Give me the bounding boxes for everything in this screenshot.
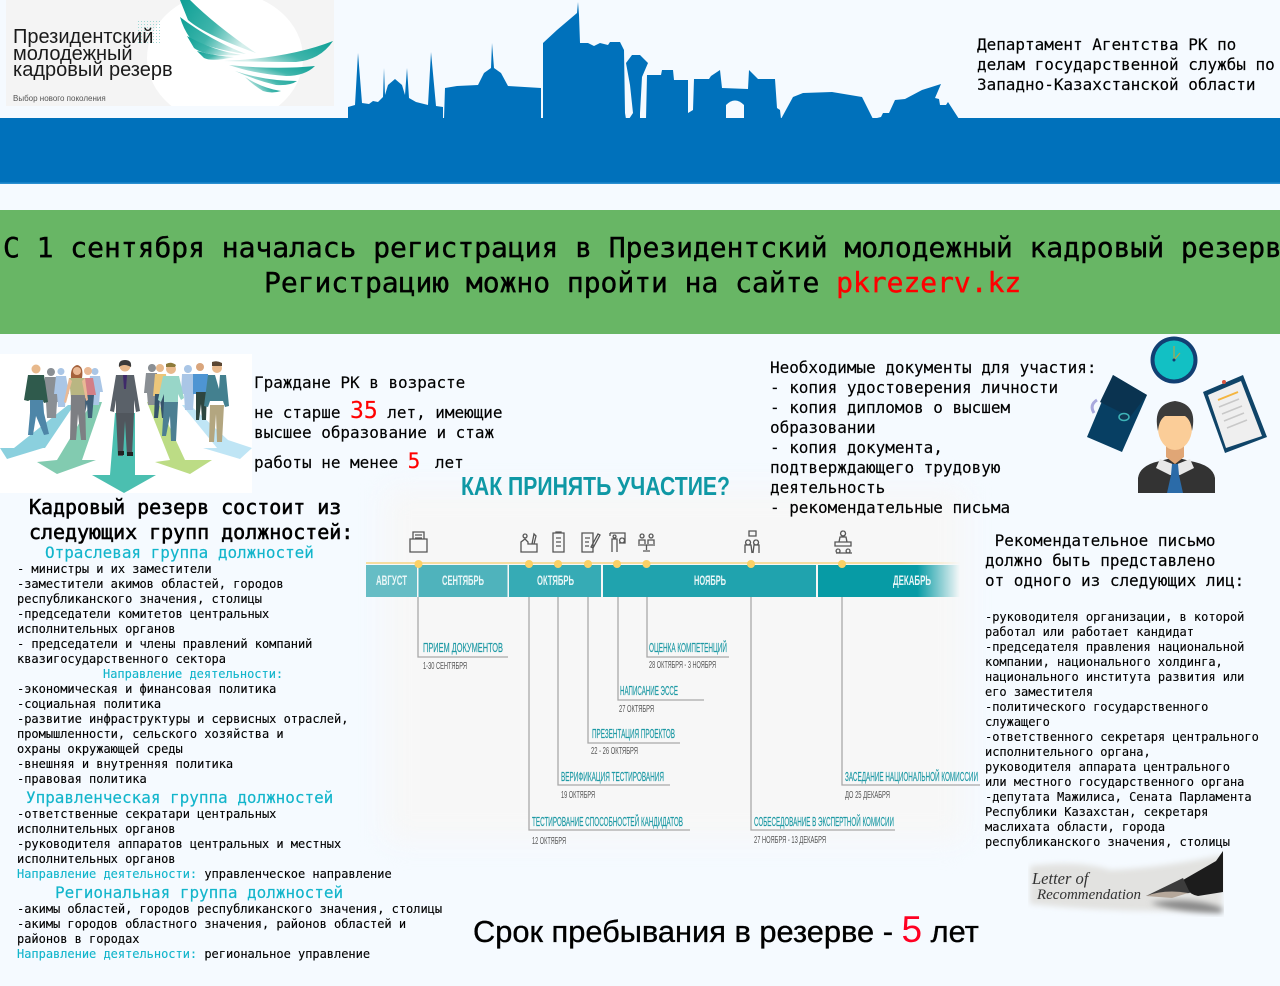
stage dates: ДО 25 ДЕКАБРЯ [845, 790, 890, 801]
arrows [0, 402, 252, 493]
month bars [366, 565, 960, 597]
group: regional [17, 883, 442, 961]
clock [1150, 336, 1198, 384]
regional direction: Направление деятельности: региональное управление [17, 947, 370, 961]
timeline icons [410, 531, 852, 553]
required documents: Необходимые документы для участия: - копия удостоверения личности - копия дипломов о высшем образовании - копия документа, подтверждающего трудовую деятельность - рекомендательные письма [770, 358, 1096, 517]
stage dates: 19 ОКТЯБРЯ [561, 790, 595, 801]
month bars: СЕНТЯБРЬ [442, 572, 484, 588]
person: woman in beige [64, 365, 88, 440]
reserve term: Срок пребывания в резерве - 5 лет [473, 909, 979, 950]
regional positions: -акимы областей, городов республиканского значения, столицы -акимы городов областного значения, районов областей и районов в городах [17, 902, 442, 946]
sectoral heading: Отраслевая группа должностей [45, 543, 314, 562]
stage dates: 27 ОКТЯБРЯ [619, 704, 654, 715]
person: teal jacket [204, 361, 229, 442]
stage labels: ТЕСТИРОВАНИЕ СПОСОБНОСТЕЙ КАНДИДАТОВ [532, 814, 683, 829]
header blue band with skyline [0, 2, 1280, 184]
eligibility line 3: высшее образование и стаж [254, 423, 494, 442]
stage dates: 28 ОКТЯБРЯ - 3 НОЯБРЯ [649, 660, 716, 671]
sectoral positions: - министры и их заместители -заместители акимов областей, городов республиканского значения, столицы -председатели комитетов центральных исполнительных органов - председатели и члены правлений компаний квазигосударственного сектора [17, 562, 312, 666]
pen [1146, 851, 1223, 898]
icon: clerk with clock, folder and clipboard [1087, 336, 1267, 493]
managerial positions: -ответственные секратари центральных исполнительных органов -руководителя аппаратов центральных и местных исполнительных органов [17, 807, 341, 866]
recommendation letter heading: Рекомендательное письмо должно быть представлено от одного из следующих лиц: [985, 531, 1244, 590]
month bars: АВГУСТ [376, 572, 407, 588]
stage dates: 27 НОЯБРЯ - 13 ДЕКАБРЯ [754, 835, 826, 846]
group: managerial [17, 788, 392, 881]
folder [1087, 375, 1147, 452]
clipboard [1203, 375, 1267, 453]
eligibility line 4: работы не менее 5 лет [254, 449, 464, 473]
stage dates: 22 - 26 ОКТЯБРЯ [591, 746, 638, 757]
banner line 1: С 1 сентября началась регистрация в Президентский молодежный кадровый резерв [3, 231, 1280, 264]
chart title: КАК ПРИНЯТЬ УЧАСТИЕ? [461, 471, 730, 501]
person: blue shirt [193, 363, 209, 420]
sectoral directions: -экономическая и финансовая политика -социальная политика -развитие инфраструктуры и сервисных отраслей, промышленности, сельского хозяйства и охраны окружающей среды -внешняя и внутренняя политика -правовая политика [17, 682, 348, 786]
people illustration [0, 354, 252, 493]
person: mint sweater [158, 363, 184, 441]
month bars: ОКТЯБРЬ [537, 572, 574, 588]
stage dates: 12 ОКТЯБРЯ [532, 836, 566, 847]
regional heading: Региональная группа должностей [55, 883, 343, 902]
logo [6, 0, 334, 106]
logo slogan: Выбор нового поколения [13, 94, 106, 103]
handwritten text line 2: Recommendation [1036, 887, 1141, 903]
eligibility text [254, 373, 503, 473]
person: central suit [110, 360, 140, 456]
stage labels: НАПИСАНИЕ ЭССЕ [620, 683, 678, 698]
sectoral direction label: Направление деятельности: [103, 667, 283, 681]
month bars: НОЯБРЬ [694, 572, 726, 588]
green banner [0, 210, 1280, 334]
background silhouettes [43, 364, 160, 418]
heading: reserve groups: Кадровый резерв состоит из следующих групп должностей: [29, 495, 353, 544]
stage labels: ОЦЕНКА КОМПЕТЕНЦИЙ [649, 640, 727, 655]
logo wing emblem [138, 0, 333, 106]
stage labels: ВЕРИФИКАЦИЯ ТЕСТИРОВАНИЯ [561, 769, 664, 784]
connector lines [418, 597, 980, 830]
eligibility line 1: Граждане РК в возрасте [254, 373, 465, 392]
group: sectoral [17, 543, 348, 786]
handwritten text: Letter of [1031, 869, 1091, 888]
logo title: Президентский молодежный кадровый резерв [13, 26, 173, 81]
clerk [1138, 401, 1215, 493]
stage labels: ПРЕЗЕНТАЦИЯ ПРОЕКТОВ [592, 726, 675, 741]
stage labels [423, 640, 978, 829]
person: green jacket [24, 364, 49, 435]
timeline dots [414, 560, 846, 568]
chart backdrop [385, 490, 965, 840]
timeline axis [366, 562, 961, 564]
person: pink woman [81, 367, 96, 418]
managerial heading: Управленческая группа должностей [26, 788, 333, 807]
stage labels: ПРИЕМ ДОКУМЕНТОВ [423, 640, 503, 655]
letter of recommendation image [1028, 851, 1224, 917]
month bars: ДЕКАБРЬ [893, 572, 931, 588]
banner line 2: Регистрацию можно пройти на сайте pkrezerv.kz [264, 266, 1021, 299]
department name: Департамент Агентства РК по делам государственной службы по Западно-Казахстанской области [977, 35, 1275, 94]
stage dates: 1-30 СЕНТЯБРЯ [423, 661, 467, 672]
timeline chart [366, 471, 980, 847]
stage dates [423, 660, 890, 847]
person: yellow shirt [153, 364, 168, 418]
eligibility line 2: не старше 35 лет, имеющие [254, 398, 503, 424]
managerial direction: Направление деятельности: управленческое направление [17, 867, 392, 881]
recommendation letter list: -руководителя организации, в которой работал или работает кандидат -председателя правления национальной компании, национального холдинга, национального института развития или его заместителя -политического государственного служащего -ответственного секретаря центрального исполнительного органа, руководителя аппарата центрального или местного государственного органа -депутата Мажилиса, Сената Парламента Республики Казахстан, секретаря маслихата области, города республиканского значения, столицы [985, 610, 1259, 849]
